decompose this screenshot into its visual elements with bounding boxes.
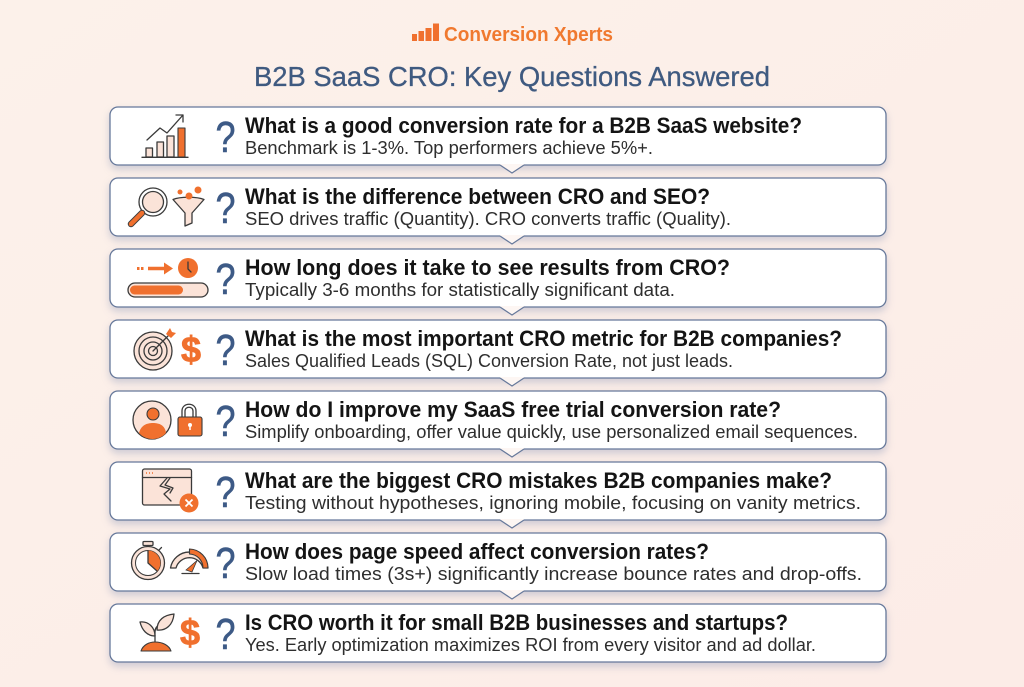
answer text: Slow load times (3s+) significantly increase bounce rates and drop-offs. <box>245 563 862 584</box>
panel: question 5 <box>110 391 886 457</box>
icon: user in circle <box>133 401 171 439</box>
icon: funnel with dots <box>173 186 204 226</box>
answer text: Benchmark is 1-3%. Top performers achieve 5%+. <box>245 137 653 158</box>
panel: question 3 <box>110 249 886 315</box>
question mark: ? <box>216 397 236 446</box>
answer text: Typically 3-6 months for statistically significant data. <box>245 279 675 300</box>
answer text: Testing without hypotheses, ignoring mobile, focusing on vanity metrics. <box>245 492 861 513</box>
question text: What is the difference between CRO and SEO? <box>245 184 710 209</box>
icon: speedometer gauge <box>170 549 208 574</box>
question mark: ? <box>216 255 236 304</box>
question text: What are the biggest CRO mistakes B2B companies make? <box>245 468 832 493</box>
question text: Is CRO worth it for small B2B businesses and startups? <box>245 610 788 635</box>
panel: question 8 <box>110 604 886 662</box>
answer text: SEO drives traffic (Quantity). CRO converts traffic (Quality). <box>245 208 731 229</box>
question mark: ? <box>216 610 236 659</box>
answer text: Yes. Early optimization maximizes ROI from every visitor and ad dollar. <box>245 634 816 655</box>
icon: dollar sign: $ <box>181 329 201 370</box>
icon: target with dart <box>134 328 176 370</box>
question mark: ? <box>216 184 236 233</box>
panel: question 4 <box>110 320 886 386</box>
question text: How do I improve my SaaS free trial conversion rate? <box>245 397 781 422</box>
answer text: Sales Qualified Leads (SQL) Conversion Rate, not just leads. <box>245 350 733 371</box>
icon: stopwatch <box>132 542 164 580</box>
answer text: Simplify onboarding, offer value quickly, use personalized email sequences. <box>245 421 858 442</box>
panel: question 6 <box>110 462 886 528</box>
question mark: ? <box>216 539 236 588</box>
question text: What is a good conversion rate for a B2B SaaS website? <box>245 113 802 138</box>
question text: How does page speed affect conversion rates? <box>245 539 709 564</box>
logo: Conversion Xperts: Conversion Xperts <box>444 23 613 46</box>
panel: question 1 <box>110 107 886 173</box>
title: B2B SaaS CRO: Key Questions Answered <box>254 61 770 92</box>
icon: bar chart with rising arrow <box>142 115 188 157</box>
panel: question 7 <box>110 533 886 599</box>
icon: progress bar <box>128 283 208 297</box>
question text: How long does it take to see results from CRO? <box>245 255 730 280</box>
icon: padlock <box>178 404 202 436</box>
question mark: ? <box>216 113 236 162</box>
icon: sprouting plant <box>140 614 174 651</box>
question text: What is the most important CRO metric for B2B companies? <box>245 326 842 351</box>
icon: magnifying glass <box>131 188 167 224</box>
panel: question 2 <box>110 178 886 244</box>
icon: dollar sign: $ <box>180 612 200 653</box>
question mark: ? <box>216 326 236 375</box>
icon: broken browser window with error badge <box>142 469 198 512</box>
question mark: ? <box>216 468 236 517</box>
icon: arrow to clock <box>137 258 198 278</box>
